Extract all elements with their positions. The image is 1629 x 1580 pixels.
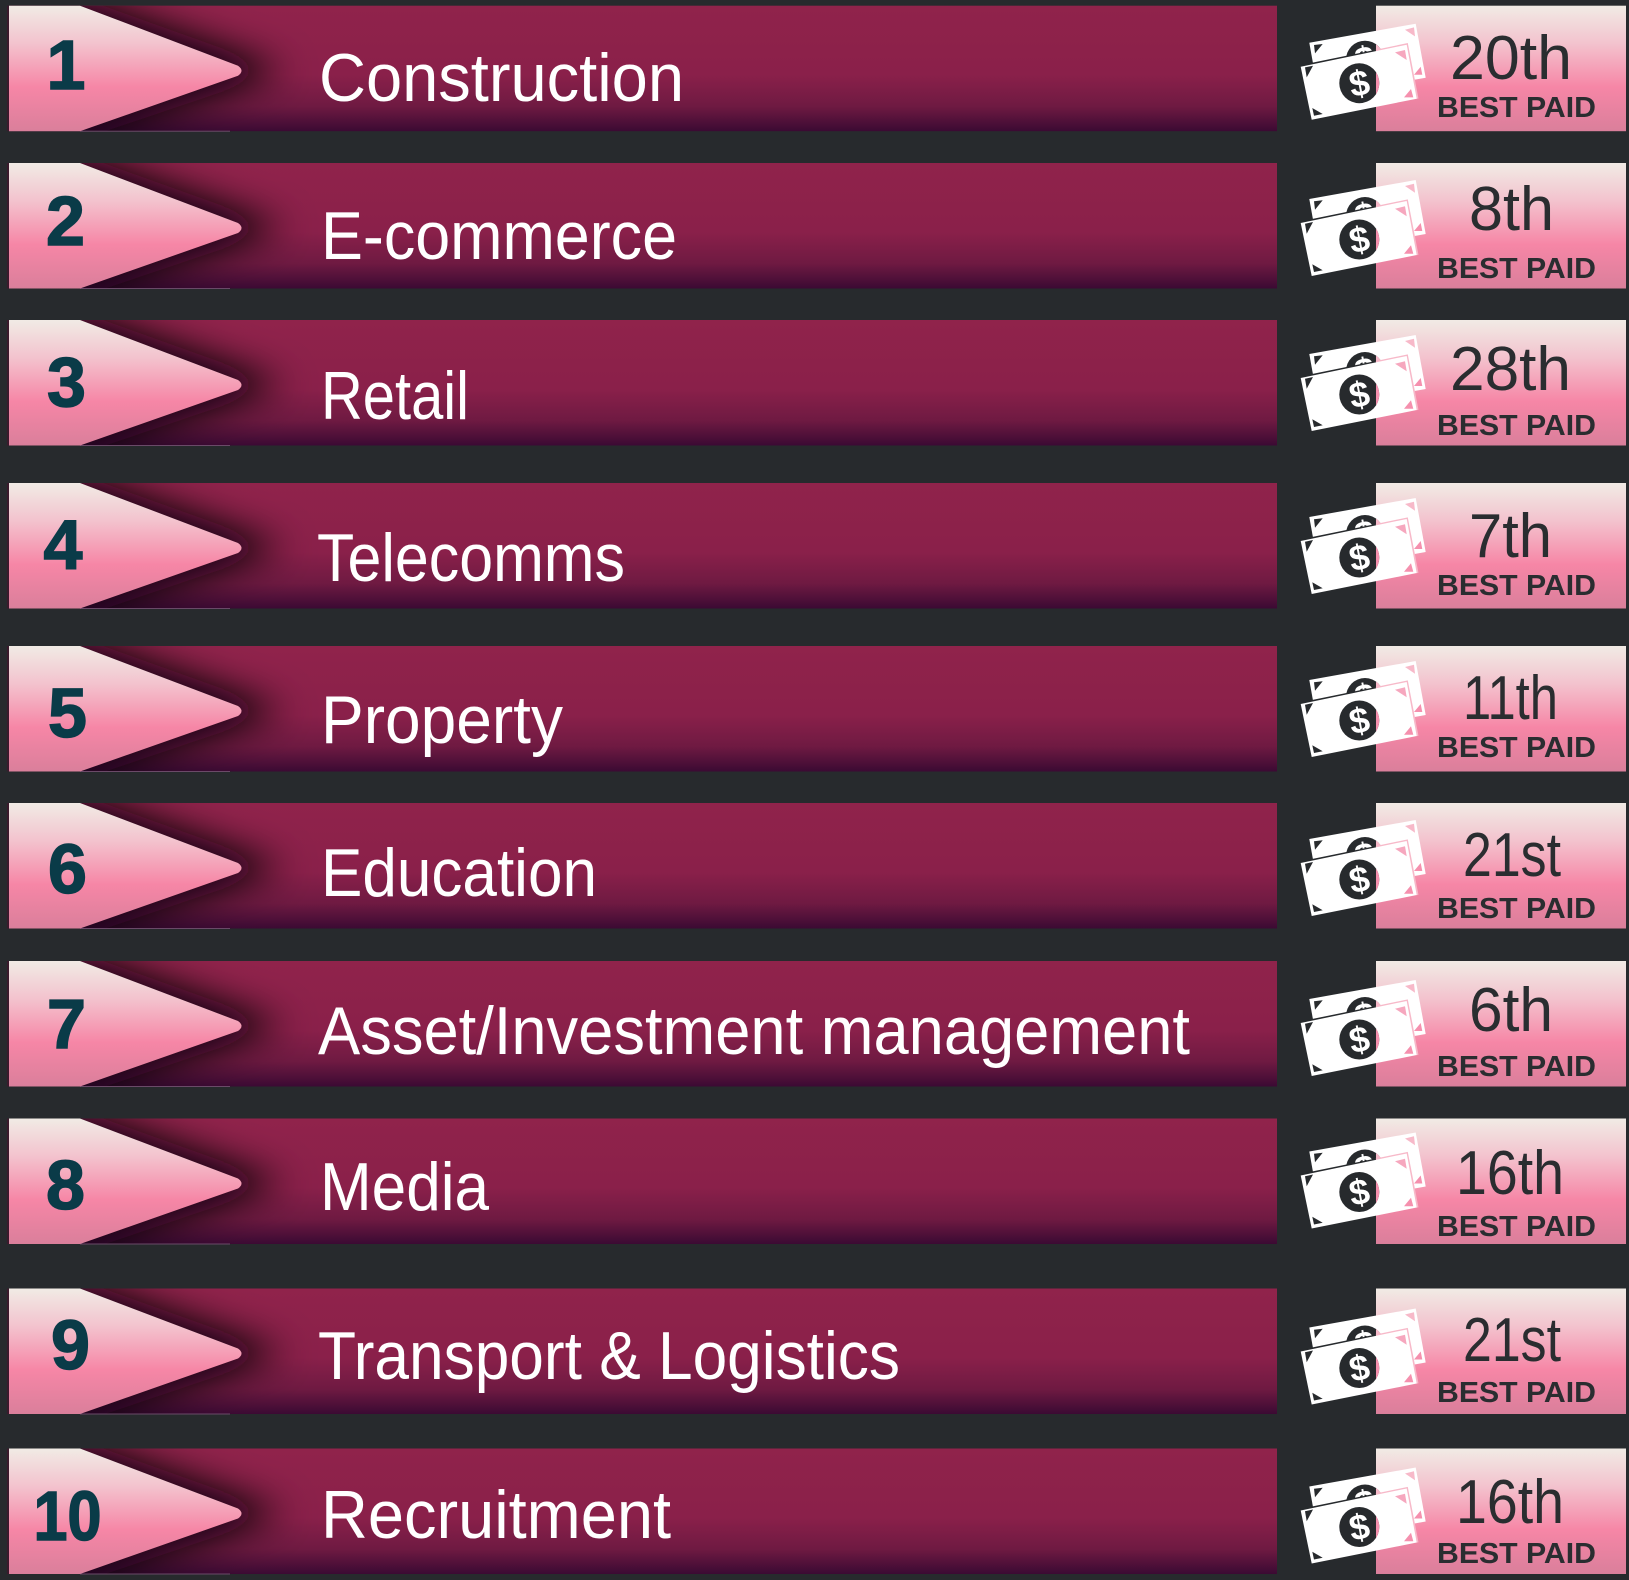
pay panel bbox=[1376, 646, 1626, 772]
icon: banknotes bbox=[1300, 1132, 1426, 1228]
pay rank: 11th bbox=[1463, 664, 1558, 733]
rank number 9: 9 bbox=[51, 1306, 90, 1384]
icon: banknotes: $ bbox=[1351, 674, 1379, 719]
rank number 10: 10 bbox=[34, 1477, 102, 1555]
row 5: Property bbox=[7, 642, 1626, 776]
icon: banknotes: $ bbox=[1346, 535, 1373, 580]
pay panel bbox=[1376, 1118, 1626, 1244]
icon: banknotes: $ bbox=[1351, 1146, 1379, 1190]
pay panel bbox=[1376, 320, 1626, 446]
pay panel bbox=[1376, 483, 1626, 608]
sector label: Property bbox=[321, 682, 563, 758]
bar 10 bbox=[7, 1444, 1277, 1578]
rank number 4: 4 bbox=[44, 506, 83, 584]
icon: banknotes: $ bbox=[1346, 372, 1373, 417]
bar 9 bbox=[7, 1284, 1277, 1418]
pay rank: 6th bbox=[1469, 976, 1553, 1045]
icon: banknotes: $ bbox=[1346, 1017, 1373, 1062]
icon: banknotes bbox=[1300, 1308, 1426, 1404]
icon: banknotes: $ bbox=[1346, 1346, 1373, 1390]
best paid caption: BEST PAID bbox=[1437, 1377, 1596, 1409]
icon: banknotes bbox=[1300, 820, 1426, 916]
pay rank: 21st bbox=[1463, 1306, 1561, 1375]
bar 7 bbox=[7, 957, 1277, 1091]
bar 3 bbox=[7, 316, 1277, 450]
bar 1 bbox=[7, 2, 1277, 136]
icon: banknotes bbox=[1300, 980, 1426, 1076]
best paid caption: BEST PAID bbox=[1437, 1211, 1596, 1243]
icon: banknotes bbox=[1300, 180, 1426, 276]
row 3: Retail bbox=[7, 316, 1626, 450]
best paid caption: BEST PAID bbox=[1437, 893, 1596, 925]
rank number 5: 5 bbox=[48, 674, 87, 752]
pay rank: 16th bbox=[1456, 1468, 1564, 1537]
pay rank: 7th bbox=[1469, 502, 1552, 571]
pay rank: 20th bbox=[1450, 24, 1572, 93]
icon: banknotes: $ bbox=[1346, 698, 1373, 743]
best paid caption: BEST PAID bbox=[1437, 92, 1596, 124]
bar 2 bbox=[7, 159, 1277, 293]
pay rank: 8th bbox=[1469, 175, 1554, 244]
sector label: Retail bbox=[321, 358, 469, 434]
best paid caption: BEST PAID bbox=[1437, 410, 1596, 442]
sector label: Media bbox=[320, 1149, 489, 1225]
icon: banknotes: $ bbox=[1346, 1170, 1373, 1214]
pay panel bbox=[1376, 163, 1626, 288]
rank number 8: 8 bbox=[46, 1146, 85, 1224]
row 7: Asset/Investment management bbox=[7, 957, 1626, 1091]
icon: banknotes: $ bbox=[1351, 348, 1379, 393]
bar 8 bbox=[7, 1114, 1277, 1248]
best paid caption: BEST PAID bbox=[1437, 1051, 1596, 1083]
pay rank: 21st bbox=[1463, 821, 1561, 890]
bar 4 bbox=[7, 479, 1277, 613]
pay panel bbox=[1376, 961, 1626, 1086]
bar 5 bbox=[7, 642, 1277, 776]
row 8: Media bbox=[7, 1114, 1626, 1248]
icon: banknotes bbox=[1300, 661, 1426, 757]
best paid caption: BEST PAID bbox=[1437, 570, 1596, 602]
sector label: Telecomms bbox=[317, 520, 625, 596]
best paid caption: BEST PAID bbox=[1437, 732, 1596, 764]
pay panel bbox=[1376, 1448, 1626, 1574]
icon: banknotes: $ bbox=[1351, 1322, 1379, 1366]
icon: banknotes: $ bbox=[1346, 857, 1373, 902]
icon: banknotes: $ bbox=[1351, 193, 1379, 238]
sector label: Asset/Investment management bbox=[318, 993, 1190, 1069]
row 6: Education bbox=[7, 799, 1626, 933]
rank number 1: 1 bbox=[47, 26, 85, 104]
rank number 7: 7 bbox=[47, 985, 86, 1063]
icon: banknotes bbox=[1300, 24, 1426, 120]
best paid caption: BEST PAID bbox=[1437, 253, 1596, 285]
icon: banknotes: $ bbox=[1346, 1505, 1373, 1549]
sector label: E-commerce bbox=[321, 198, 677, 274]
pay rank: 16th bbox=[1456, 1139, 1564, 1208]
best paid caption: BEST PAID bbox=[1437, 1538, 1596, 1570]
icon: banknotes: $ bbox=[1351, 511, 1379, 556]
pay rank: 28th bbox=[1450, 335, 1571, 404]
icon: banknotes bbox=[1300, 335, 1426, 431]
rank number 3: 3 bbox=[47, 343, 86, 421]
icon: banknotes: $ bbox=[1351, 993, 1379, 1038]
bar 6 bbox=[7, 799, 1277, 933]
sector label: Recruitment bbox=[321, 1477, 671, 1553]
icon: banknotes: $ bbox=[1346, 61, 1373, 105]
row 9: Transport & Logistics bbox=[7, 1284, 1626, 1418]
icon: banknotes: $ bbox=[1351, 1481, 1379, 1525]
sector label: Education bbox=[321, 835, 597, 911]
pay panel bbox=[1376, 803, 1626, 928]
pay panel bbox=[1376, 1288, 1626, 1414]
row 1: Construction bbox=[7, 2, 1626, 136]
icon: banknotes: $ bbox=[1351, 37, 1379, 81]
icon: banknotes bbox=[1300, 498, 1426, 594]
icon: banknotes bbox=[1300, 1468, 1426, 1564]
rank number 2: 2 bbox=[46, 182, 85, 260]
rank number 6: 6 bbox=[48, 830, 87, 908]
row 10: Recruitment bbox=[7, 1444, 1626, 1578]
pay panel bbox=[1376, 6, 1626, 131]
row 4: Telecomms bbox=[7, 479, 1626, 613]
icon: banknotes: $ bbox=[1351, 833, 1379, 878]
icon: banknotes: $ bbox=[1346, 217, 1373, 262]
row 2: E-commerce bbox=[7, 159, 1626, 293]
sector label: Transport & Logistics bbox=[318, 1318, 900, 1394]
sector label: Construction bbox=[319, 40, 684, 116]
